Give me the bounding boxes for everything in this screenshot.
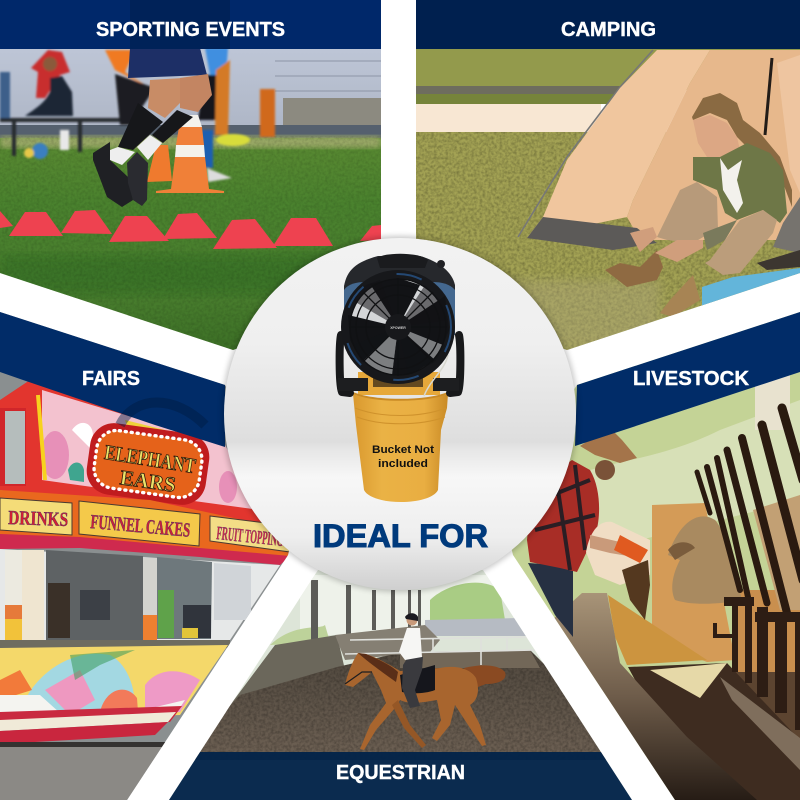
banner: sporting events: SPORTING EVENTS [96, 19, 285, 41]
bucket [353, 372, 448, 502]
stanchion posts [713, 597, 800, 730]
banner: sporting events [0, 0, 381, 49]
banner: livestock: LIVESTOCK [633, 368, 750, 390]
sign boards: DRINKS [8, 507, 69, 531]
navy band: equestrian [150, 752, 650, 800]
far ground [736, 672, 800, 738]
fair mural top [0, 380, 270, 530]
windows [0, 549, 280, 648]
bucket note: Bucket Not [372, 444, 434, 456]
fan grille: XPOWER [390, 326, 406, 330]
arena floor [195, 650, 606, 760]
bucket note [372, 444, 434, 470]
panel: equestrian [169, 570, 632, 800]
traffic cones [147, 115, 224, 193]
orange fascia [0, 490, 290, 560]
heading: ideal for: IDEAL FOR [313, 518, 488, 554]
railing [345, 637, 535, 665]
cow [668, 495, 800, 610]
panel: livestock [500, 312, 800, 800]
lower mural [0, 645, 228, 722]
panel: fairs [0, 312, 300, 800]
brackets [338, 378, 459, 391]
fence board [652, 503, 735, 662]
elephant ears sign: ELEPHANT [103, 440, 197, 478]
pavement [0, 742, 170, 800]
skirt trim [0, 706, 182, 724]
panel: sporting events [0, 49, 381, 350]
banner: fairs [0, 312, 225, 447]
horse and rider [345, 613, 506, 750]
farmer [527, 430, 650, 637]
elephant ears sign: EARS [119, 465, 177, 497]
panel: fairs: FRUIT TOPPINGS [215, 523, 289, 551]
banner: fairs: FAIRS [82, 368, 140, 390]
water tube [424, 355, 448, 396]
sign boards [0, 498, 290, 552]
stanchion bars [697, 408, 800, 613]
sign boards: FUNNEL CAKES [90, 511, 191, 542]
product: fan on bucket [338, 254, 460, 502]
banner: livestock [575, 312, 800, 446]
center circle [222, 236, 578, 592]
building and greenery [225, 575, 530, 712]
fan housing [344, 254, 455, 335]
red marker discs [0, 210, 381, 249]
banner label: equestrian: EQUESTRIAN [336, 762, 465, 784]
elephant ears sign [86, 423, 210, 505]
banner: camping [416, 0, 800, 49]
camper woman [605, 93, 800, 317]
red awning [0, 534, 290, 565]
panel: camping [416, 49, 800, 350]
spectators and bench [0, 48, 275, 182]
jumping legs and shoes [93, 48, 212, 207]
banner: camping: CAMPING [561, 19, 656, 41]
bucket note: included [378, 458, 428, 470]
tent [518, 50, 800, 250]
fan grille [341, 270, 455, 384]
side stand [340, 335, 460, 393]
trough [530, 593, 800, 800]
